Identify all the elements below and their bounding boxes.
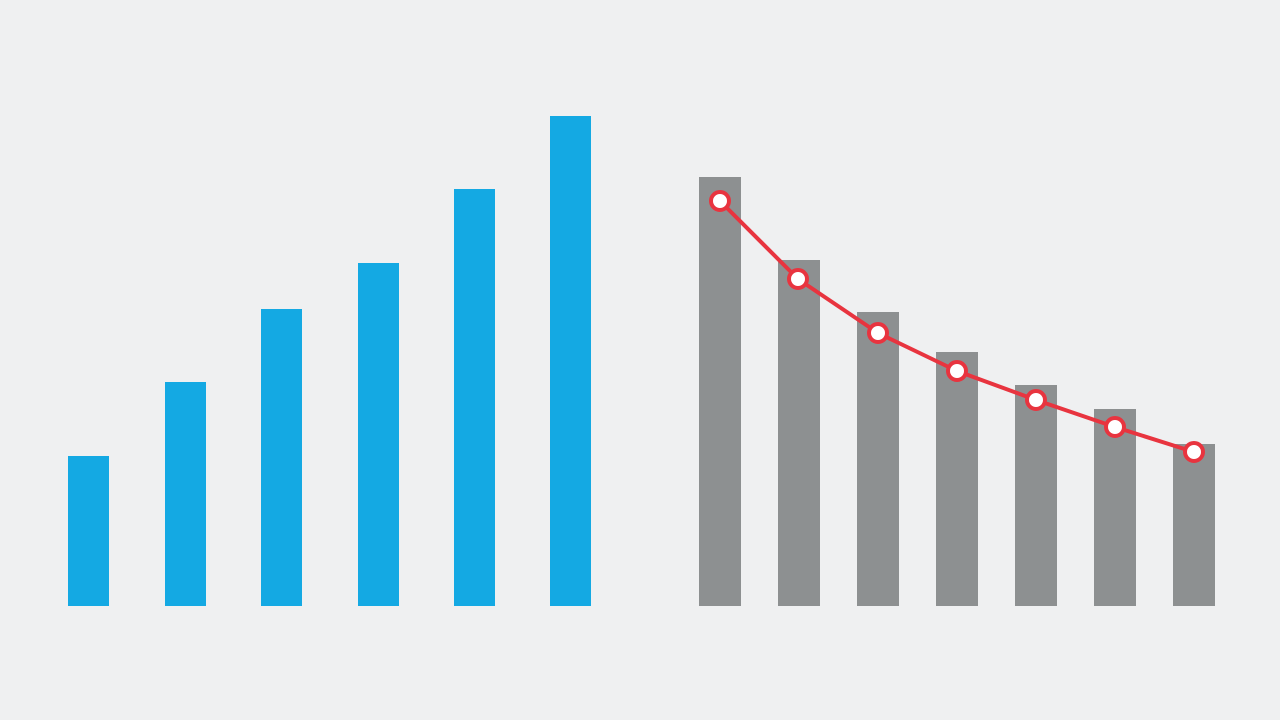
- gray bar chart: declining: [699, 177, 1215, 606]
- blue bar chart: rising: [68, 116, 591, 606]
- red trend line with markers: [711, 192, 1203, 461]
